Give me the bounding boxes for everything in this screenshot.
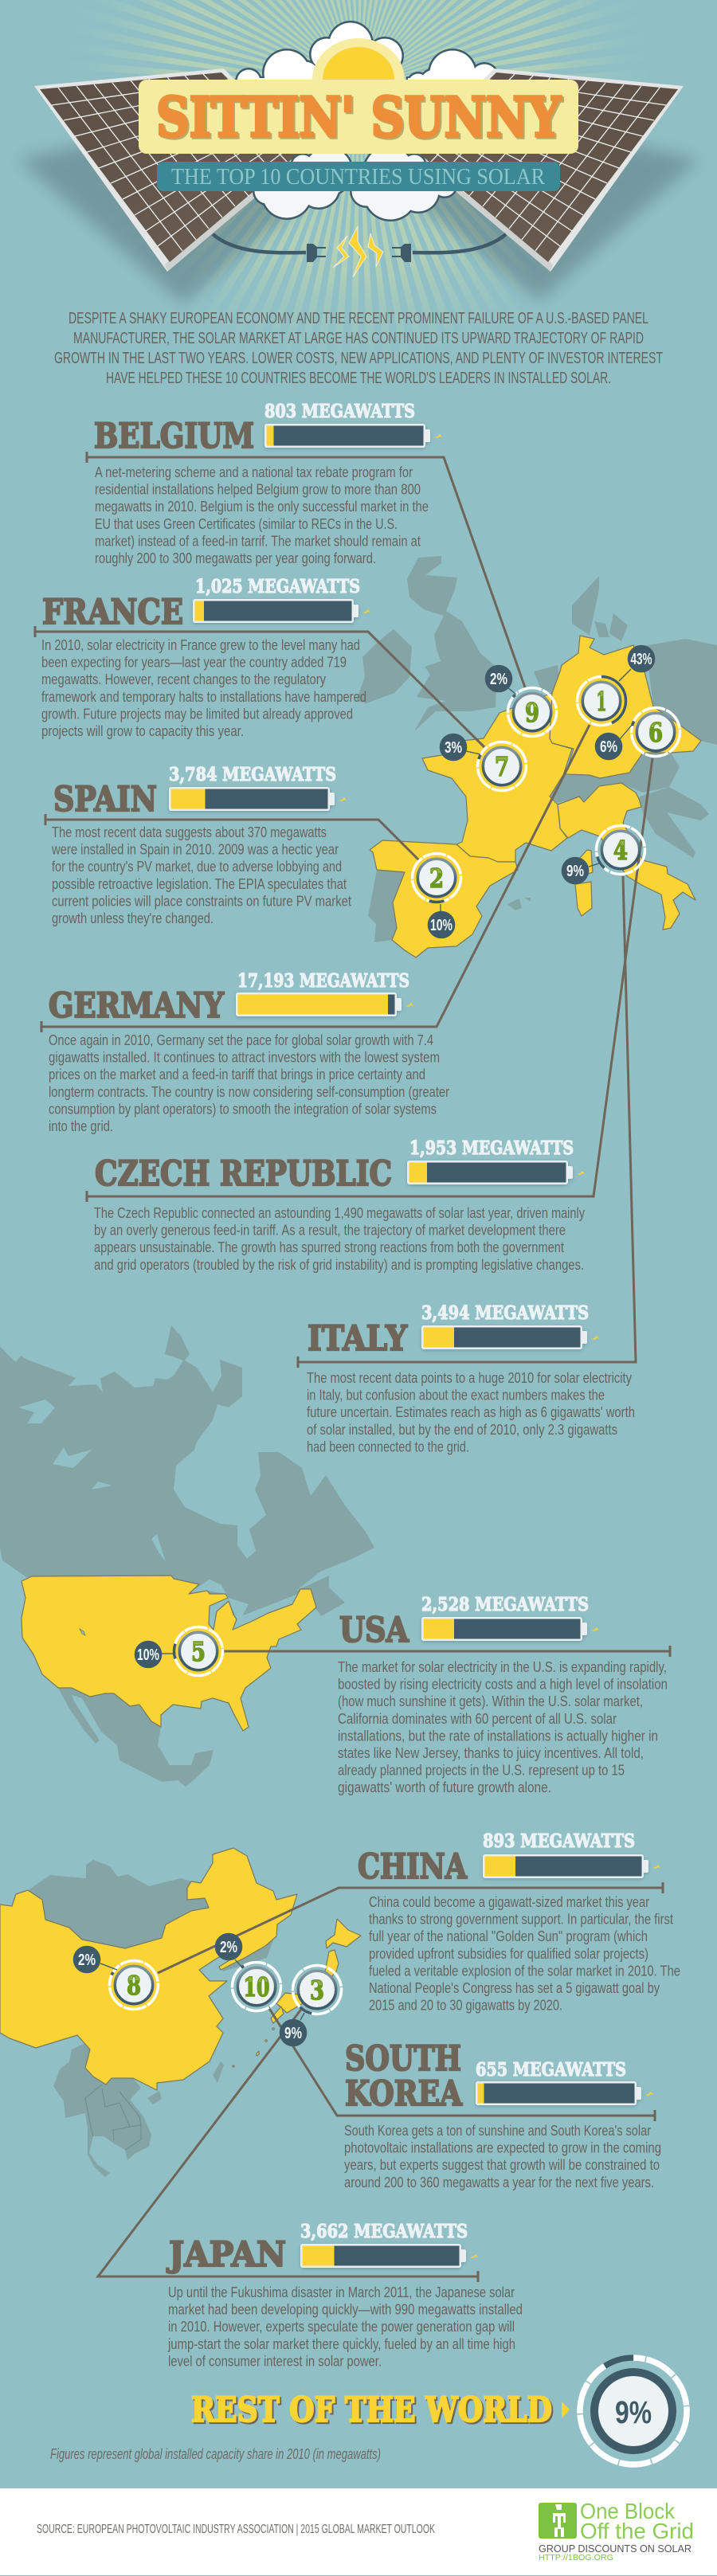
body text <box>307 1370 635 1454</box>
rest of the world heading: REST OF THE WORLD <box>193 2392 554 2432</box>
body text: provided upfront subsidies for qualified solar projects) <box>369 1946 648 1962</box>
eastern europe <box>633 639 717 745</box>
scandinavia islands <box>572 576 628 641</box>
heading: USA <box>339 1611 409 1650</box>
body text: states like New Jersey, thanks to juicy incentives. All told, <box>338 1745 644 1761</box>
9 percent Italy: 9% <box>566 863 584 880</box>
body text: full year of the national "Golden Sun" program (which <box>369 1928 648 1944</box>
body text: projects will grow to capacity this year. <box>41 723 244 739</box>
megawatt label: 1,953 MEGAWATTS <box>409 1137 574 1159</box>
body text: China could become a gigawatt-sized market this year <box>369 1894 649 1910</box>
section: Spain <box>51 764 351 926</box>
10 percent USA <box>135 1641 174 1668</box>
body text: future uncertain. Estimates reach as high as 6 gigawatts' worth <box>307 1404 635 1420</box>
9 percent Japan: 9% <box>284 2025 302 2042</box>
badge 5 USA: 5 <box>191 1636 206 1667</box>
plugs and cables <box>213 234 506 262</box>
badge 6 Czech Republic <box>626 703 685 761</box>
usa <box>22 1576 316 1731</box>
corsica and sardinia <box>575 850 593 916</box>
battery gauge <box>169 787 347 811</box>
10 percent Spain <box>428 904 455 938</box>
logo mark <box>539 2503 577 2539</box>
logo text <box>539 2499 694 2562</box>
footer <box>0 2488 717 2575</box>
heading: GERMANY <box>49 986 225 1026</box>
body text: photovoltaic installations are expected to grow in the coming <box>344 2140 661 2156</box>
solar panel shadows <box>18 127 699 304</box>
rest of the world heading: REST OF THE WORLD <box>191 2390 552 2430</box>
battery gauge <box>193 599 370 623</box>
battery gauge <box>300 2244 478 2268</box>
section: Germany <box>49 970 449 1134</box>
3 percent France <box>440 734 480 761</box>
2 percent South Korea <box>215 1933 243 1968</box>
2 percent South Korea: 2% <box>220 1939 237 1956</box>
lower clouds <box>253 145 458 221</box>
body text: (how much sunshine it gets). Within the U.S. solar market, <box>338 1693 643 1709</box>
body text: jump-start the solar market there quickly, fueled by an all time high <box>167 2336 515 2352</box>
body text: roughly 200 to 300 megawatts per year going forward. <box>95 550 376 566</box>
arrow <box>562 2402 570 2418</box>
43 percent <box>619 645 655 681</box>
2 percent Belgium: 2% <box>490 671 507 688</box>
body text: 2015 and 20 to 30 gigawatts by 2020. <box>369 1998 562 2014</box>
6 percent Czech: 6% <box>600 738 617 756</box>
badge 6 Czech Republic: 6 <box>648 717 663 748</box>
body text: installations, but the rate of installations is actually higher in <box>338 1728 658 1744</box>
10 percent USA: 10% <box>137 1646 159 1664</box>
logo text: GROUP DISCOUNTS ON SOLAR <box>539 2543 692 2554</box>
title: SITTIN' SUNNY <box>156 86 562 150</box>
body text: by an overly generous feed-in tariff. As a result, the trajectory of market development there <box>94 1223 566 1239</box>
title plate <box>139 80 578 154</box>
france and belgium <box>422 693 572 862</box>
icon: lightning bolts <box>333 226 383 277</box>
badge 9 Belgium <box>498 678 566 746</box>
battery gauge <box>236 992 413 1016</box>
percent callouts <box>73 645 655 2046</box>
china <box>0 1848 297 2090</box>
mongolia <box>28 1860 209 1948</box>
ireland <box>356 629 412 703</box>
logo text: Off the Grid <box>580 2519 694 2543</box>
body text: for the country's PV market, due to adverse lobbying and <box>52 859 342 875</box>
subtitle plate: THE TOP 10 COUNTRIES USING SOLAR <box>171 164 546 190</box>
2 percent China <box>73 1946 117 1973</box>
canada <box>0 1325 374 1617</box>
badge 9 Belgium: 9 <box>525 697 539 728</box>
body text <box>338 1659 668 1795</box>
southeast asia <box>53 2043 151 2177</box>
badge 7 France: 7 <box>495 751 509 782</box>
body text: framework and temporary halts to installations have hampered <box>41 689 366 705</box>
body text: longterm contracts. The country is now considering self-consumption (greater <box>49 1084 449 1100</box>
section: Japan <box>166 2221 523 2369</box>
badge 4 Italy: 4 <box>613 835 628 866</box>
japan <box>233 1919 361 2067</box>
badge 5 USA <box>168 1621 229 1681</box>
intro text <box>54 310 663 387</box>
heading: ITALY <box>308 1319 408 1359</box>
badge 2 Spain: 2 <box>429 863 444 894</box>
body text: level of consumer interest in solar power. <box>168 2353 382 2369</box>
body text <box>51 824 351 926</box>
spain <box>370 840 518 957</box>
megawatt label: 3,662 MEGAWATTS <box>300 2221 468 2242</box>
megawatt label: 1,025 MEGAWATTS <box>195 576 360 597</box>
battery gauge <box>421 1617 599 1641</box>
body text <box>49 1032 449 1134</box>
body text: National People's Congress has set a 5 gigawatt goal by <box>369 1980 660 1996</box>
section: France <box>41 576 370 739</box>
heading: JAPAN <box>166 2235 286 2275</box>
section: Belgium <box>94 401 442 566</box>
section: South Korea <box>344 2039 661 2190</box>
heading <box>345 2039 463 2114</box>
badge 3 Japan <box>288 1960 347 2019</box>
megawatt label: 3,784 MEGAWATTS <box>169 764 336 785</box>
leader lines <box>35 452 670 2282</box>
battery gauge <box>476 2081 653 2105</box>
header clouds and sun <box>235 21 500 121</box>
body text: been expecting for years—last year the country added 719 <box>41 655 347 671</box>
body text: consumption by plant operators) to smooth the integration of solar systems <box>49 1101 437 1117</box>
body text: megawatts in 2010. Belgium is the only successful market in the <box>95 499 429 515</box>
korea <box>221 1940 273 1971</box>
map: North America <box>0 1325 374 1787</box>
body text: in Italy, but confusion about the exact numbers makes the <box>307 1388 605 1403</box>
body text <box>167 2284 523 2369</box>
body text: In 2010, solar electricity in France grew to the level many had <box>41 637 360 653</box>
heading: BELGIUM <box>94 417 254 456</box>
megawatt label: 655 MEGAWATTS <box>476 2059 626 2081</box>
mexico <box>58 1688 214 1787</box>
heading: CHINA <box>358 1847 468 1887</box>
badge 8 China: 8 <box>127 1970 141 2001</box>
43 percent: 43% <box>631 651 652 668</box>
body text: residential installations helped Belgium grow to more than 800 <box>95 482 421 498</box>
body text: The most recent data suggests about 370 megawatts <box>52 824 327 840</box>
body text: years, but experts suggest that growth will be constrained to <box>344 2157 660 2173</box>
italy <box>558 783 695 930</box>
section: China <box>358 1830 680 2014</box>
battery gauge <box>421 1325 599 1349</box>
body text: A net-metering scheme and a national tax rebate program for <box>95 464 413 480</box>
map: Asia <box>0 1848 361 2177</box>
body text <box>369 1894 680 2014</box>
right solar panel <box>411 69 684 272</box>
megawatt label: 893 MEGAWATTS <box>483 1830 635 1852</box>
body text: market had been developing quickly—with 990 megawatts installed <box>168 2302 523 2318</box>
badge 10 South Korea: 10 <box>244 1971 269 2002</box>
heading: SOUTH <box>345 2039 461 2079</box>
body text: were installed in Spain in 2010. 2009 was a hectic year <box>51 842 339 858</box>
badge 4 Italy <box>586 816 655 884</box>
title: SITTIN' SUNNY <box>158 88 563 151</box>
body text: already planned projects in the U.S. represent up to 15 <box>338 1763 625 1779</box>
body text: Once again in 2010, Germany set the pace for global solar growth with 7.4 <box>49 1032 433 1048</box>
badge 1 Germany: 1 <box>596 686 607 717</box>
badge 8 China <box>102 1953 166 2017</box>
body text: appears unsustainable. The growth has spurred strong reactions from both the government <box>94 1239 564 1255</box>
map: Europe <box>356 556 717 957</box>
body text: EU that uses Green Certificates (similar to RECs in the U.S. <box>95 516 398 532</box>
section: USA <box>338 1594 668 1795</box>
body text: gigawatts' worth of future growth alone. <box>338 1779 551 1795</box>
portugal <box>368 870 405 942</box>
body text: The most recent data points to a huge 2010 for solar electricity <box>307 1370 632 1386</box>
heading: KOREA <box>345 2074 463 2114</box>
battery gauge <box>407 1161 585 1184</box>
rest of the world ring <box>560 2338 707 2484</box>
body text <box>41 637 366 739</box>
germany <box>550 636 701 778</box>
logo text: HTTP://1BOG.ORG <box>539 2554 613 2562</box>
2 percent Belgium <box>485 665 516 695</box>
balkans <box>639 787 709 858</box>
body text: into the grid. <box>49 1118 113 1134</box>
body text: had been connected to the grid. <box>307 1439 469 1454</box>
logo text: One Block <box>580 2499 676 2523</box>
battery gauge <box>264 424 442 448</box>
battery gauge <box>483 1854 660 1878</box>
canadian lakes <box>18 1400 268 1630</box>
left solar panel <box>34 69 307 272</box>
hainan and taiwan <box>147 2061 224 2104</box>
body text <box>94 1205 585 1273</box>
megawatt label: 803 MEGAWATTS <box>264 401 415 422</box>
logo <box>539 2499 694 2562</box>
6 percent Czech <box>595 723 633 760</box>
megawatt label: 2,528 MEGAWATTS <box>421 1594 589 1615</box>
body text <box>344 2123 661 2190</box>
body text: megawatts. However, recent changes to the regulatory <box>41 671 326 687</box>
body text: market) instead of a feed-in tarrif. The market should remain at <box>95 533 421 549</box>
heading: SPAIN <box>53 780 157 820</box>
alps <box>550 753 680 803</box>
badge 7 France <box>472 736 532 797</box>
body text: growth. Future projects may be limited but already approved <box>41 706 353 722</box>
section: Italy <box>307 1302 635 1454</box>
body text: growth unless they're changed. <box>52 910 214 926</box>
body text: California dominates with 60 percent of all U.S. solar <box>338 1711 617 1727</box>
balearic islands <box>507 898 531 910</box>
10 percent Spain: 10% <box>430 917 453 934</box>
body text: Up until the Fukushima disaster in March 2011, the Japanese solar <box>168 2284 515 2300</box>
badge 1 Germany <box>577 677 626 725</box>
body text: current policies will place constraints on future PV market <box>52 893 351 909</box>
megawatt label: 3,494 MEGAWATTS <box>421 1302 589 1324</box>
9 percent Italy <box>562 857 599 884</box>
body text: prices on the market and a feed-in tariff that brings in price certainty and <box>49 1067 425 1082</box>
heading: CZECH REPUBLIC <box>95 1154 392 1194</box>
body text: of solar installed, but by the end of 2010, only 2.3 gigawatts <box>307 1422 617 1438</box>
3 percent France: 3% <box>445 739 462 757</box>
body text: The Czech Republic connected an astounding 1,490 megawatts of solar last year, driven mainly <box>94 1205 585 1221</box>
sun rays <box>206 0 511 241</box>
heading: FRANCE <box>42 593 183 632</box>
body text: gigawatts installed. It continues to attract investors with the lowest system <box>49 1050 440 1066</box>
body text: South Korea gets a ton of sunshine and South Korea's solar <box>344 2123 651 2139</box>
megawatt label: 17,193 MEGAWATTS <box>237 970 409 992</box>
badge 10 South Korea <box>222 1952 291 2021</box>
badge 3 Japan: 3 <box>310 1975 324 2006</box>
body text: possible retroactive legislation. The EPIA speculates that <box>52 876 347 892</box>
badge 2 Spain <box>406 848 467 908</box>
body text: around 200 to 360 megawatts a year for the next five years. <box>344 2175 654 2190</box>
source: SOURCE: EUROPEAN PHOTOVOLTAIC INDUSTRY ASSOCIATION | 2015 GLOBAL MARKET OUTLOOK <box>37 2523 435 2536</box>
netherlands <box>534 665 560 695</box>
body text: and grid operators (troubled by the risk of grid instability) and is prompting legislative changes. <box>94 1257 584 1273</box>
2 percent China: 2% <box>78 1952 96 1969</box>
great salt lake <box>80 1629 85 1635</box>
9 percent Japan <box>280 2013 307 2046</box>
section: Czech Republic <box>94 1137 585 1273</box>
body text <box>95 464 429 566</box>
uk <box>407 556 499 731</box>
body text: in 2010. However, experts speculate the power generation gap will <box>168 2319 515 2335</box>
rest of the world ring: 9% <box>615 2395 652 2430</box>
footnote: Figures represent global installed capacity share in 2010 (in megawatts) <box>50 2446 381 2462</box>
